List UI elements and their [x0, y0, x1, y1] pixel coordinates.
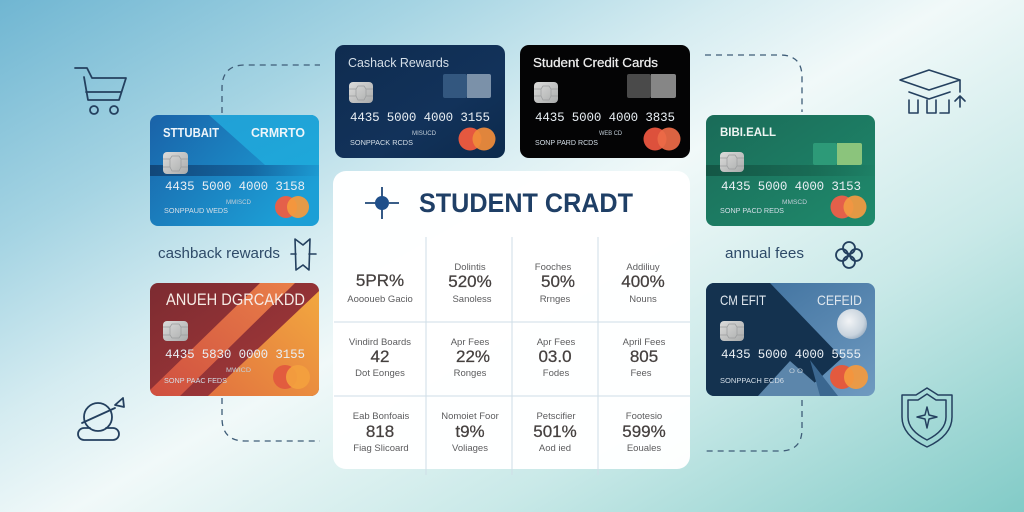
card: red annual: 4435 5830 0000 3155 [165, 348, 305, 362]
card: green: 4435 5000 4000 3153 [721, 180, 861, 194]
row 2 cells: 03.0 [538, 347, 572, 366]
card: green: SONP PACD REDS [720, 206, 784, 215]
row 1 cells: Sanoless [452, 294, 492, 305]
row 1 cells: Dolintis [454, 262, 486, 273]
row 2 cells: Vindird Boards [349, 337, 411, 348]
card: green: BIBI.EALL [720, 125, 776, 139]
card: blue student [150, 115, 319, 226]
card: navy steel [706, 283, 875, 396]
row 3 cells: Aod ied [539, 443, 571, 454]
card: navy steel: SONPPACH ECD6 [720, 376, 784, 385]
icon: shopping cart [75, 68, 126, 114]
card: blue student: MMISCD [226, 200, 252, 206]
card: cashback rewards: 4435 5000 4000 3155 [350, 111, 490, 125]
icon: clover [836, 242, 862, 268]
label: annual fees: annual fees [725, 245, 804, 262]
row 3 cells [353, 411, 666, 454]
row 3 cells: Petscifier [536, 411, 576, 422]
row 2 cells [349, 337, 666, 379]
row 2 cells: Apr Fees [537, 337, 576, 348]
panel: student credit table [333, 171, 690, 475]
row 1 cells: 50% [541, 272, 575, 291]
icon: target crosshair [365, 187, 399, 219]
card: blue student: STTUBAIT [163, 126, 219, 140]
card: red annual [150, 283, 319, 396]
row 1 cells [347, 262, 665, 305]
icon: shield [902, 388, 952, 447]
row 2 cells: 805 [630, 347, 658, 366]
card: navy steel: CEFEID [817, 292, 862, 308]
connector: bottom left [222, 398, 320, 441]
card: cashback rewards: SONPPACK RCDS [350, 138, 413, 147]
card: blue student: 4435 5000 4000 3158 [165, 180, 305, 194]
card: student credit cards [520, 45, 690, 158]
row 2 cells: Ronges [454, 368, 487, 379]
row 3 cells: 599% [622, 422, 666, 441]
row 3 cells: t9% [455, 422, 485, 441]
card: green [706, 115, 875, 226]
icon: planet and kite [78, 398, 124, 440]
card: blue student: CRMRTO [251, 126, 305, 140]
row 1 cells: Fooches [535, 262, 571, 273]
card: navy steel: CM EFIT [720, 292, 766, 308]
row 1 cells: 5PR% [356, 271, 404, 290]
card: navy steel: 4435 5000 4000 5555 [721, 348, 861, 362]
card: cashback rewards [335, 45, 505, 158]
connector: bottom right [705, 400, 802, 451]
row 2 cells: Apr Fees [451, 337, 490, 348]
row 1 cells: 400% [621, 272, 665, 291]
icon: graduation cap [900, 70, 965, 113]
card: student credit cards: 4435 5000 4000 3835 [535, 111, 675, 125]
row 3 cells: Eouales [627, 443, 661, 454]
card: cashback rewards: MISUCD [412, 131, 437, 137]
card: red annual: SONP PAAC FEDS [164, 376, 227, 385]
card: red annual: MWICD [226, 368, 252, 374]
row 3 cells: Fiag Slicoard [353, 443, 409, 454]
row 3 cells: Voliages [452, 443, 488, 454]
row 2 cells: 42 [371, 347, 389, 366]
card: red annual: ANUEH DGRCAKDD [166, 290, 305, 309]
row 2 cells: Fodes [543, 368, 569, 379]
connector: top left [222, 65, 320, 113]
card: student credit cards: Student Credit Cards [533, 55, 659, 70]
row 2 cells: Dot Eonges [355, 368, 405, 379]
card: student credit cards: WEB CD [599, 131, 623, 137]
heading: STUDENT CRADT [419, 188, 633, 218]
card: green: MMSCD [782, 200, 808, 206]
card: cashback rewards: Cashack Rewards [348, 55, 449, 70]
row 3 cells: Eab Bonfoais [353, 411, 410, 422]
row 3 cells: 818 [366, 422, 394, 441]
row 3 cells: 501% [533, 422, 577, 441]
card: navy steel: O O [789, 369, 803, 375]
row 2 cells: Fees [630, 368, 652, 379]
row 2 cells: April Fees [623, 337, 666, 348]
card: student credit cards: SONP PARD RCDS [535, 138, 598, 147]
row 3 cells: Nomoiet Foor [441, 411, 499, 422]
row 1 cells: Addiliuy [626, 262, 660, 273]
card: blue student: SONPPAUD WEDS [164, 206, 228, 215]
icon: ribbon bookmark [291, 239, 316, 270]
row 1 cells: 520% [448, 272, 492, 291]
row 3 cells: Footesio [626, 411, 662, 422]
label: cashback rewards: cashback rewards [158, 245, 280, 262]
row 1 cells: Rrnges [540, 294, 571, 305]
row 2 cells: 22% [456, 347, 490, 366]
connector: top right [705, 55, 802, 112]
row 1 cells: Aoooueb Gacio [347, 294, 413, 305]
row 1 cells: Nouns [629, 294, 657, 305]
